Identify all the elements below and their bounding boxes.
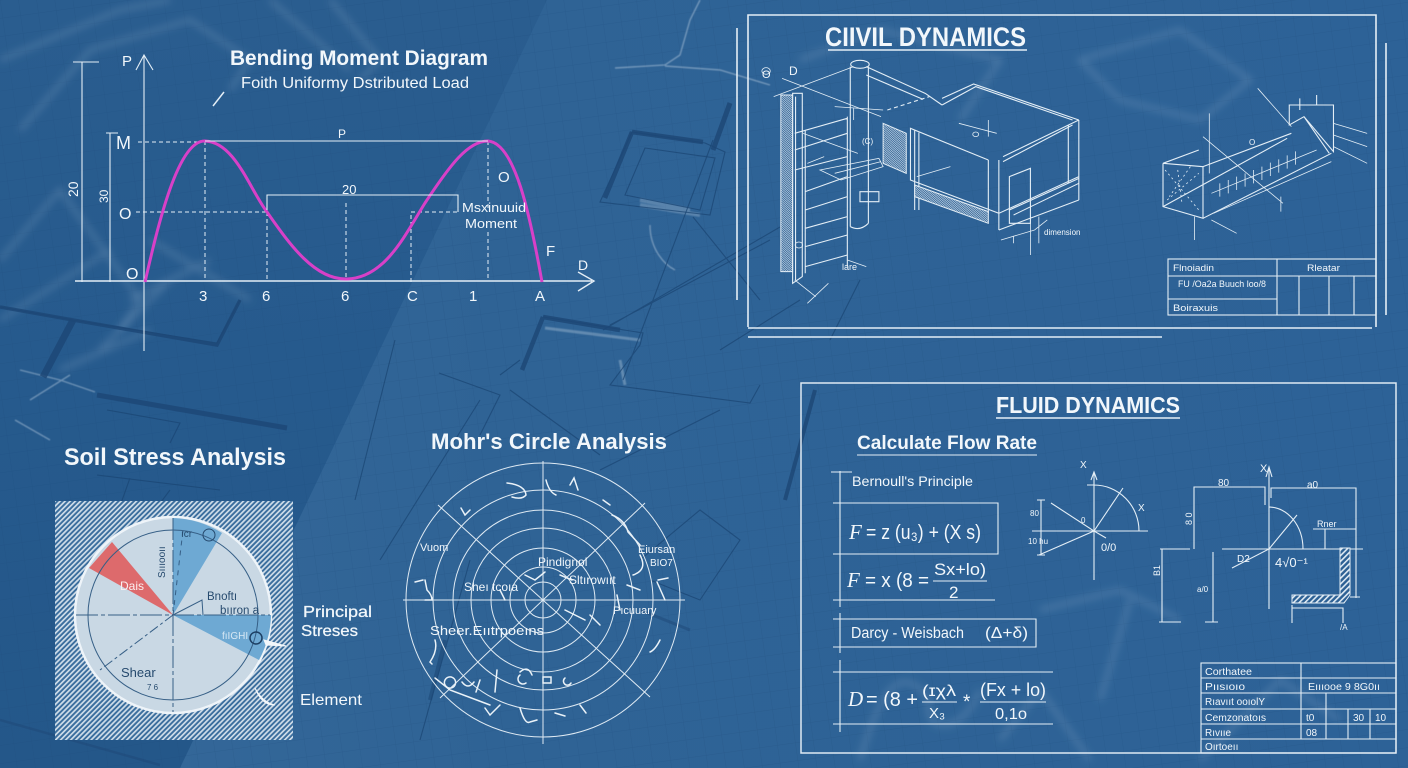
axis labels: 30	[97, 189, 111, 203]
formula: F one: F	[848, 520, 862, 544]
title block: fluid dynamics: 30	[1353, 713, 1365, 724]
diagram: section with dimensions: 8 0	[1184, 512, 1194, 525]
mohr text labels: Vuom	[420, 542, 448, 554]
label: principal stresses: Streses	[301, 623, 358, 640]
small drawing labels: O	[1249, 138, 1255, 147]
axis labels: A	[535, 288, 545, 305]
mohr text labels: Sheı tcoıa	[464, 580, 518, 594]
small drawing labels: (C)	[862, 137, 873, 146]
title: bending moment diagram: Bending Moment Diagram	[230, 47, 488, 70]
sector labels: Bnoftı	[207, 591, 237, 603]
formula: darcy-weisbach: Darcy - Weisbach	[851, 625, 964, 642]
diagram: section with dimensions: B1	[1152, 565, 1162, 576]
label: element: Element	[300, 692, 363, 709]
label: principal stresses	[301, 604, 372, 640]
diagram: section with dimensions: X	[1260, 463, 1268, 475]
panel: fluid dynamics	[801, 383, 1396, 753]
concentric circles	[403, 461, 685, 744]
diagram: section with dimensions: /A	[1340, 623, 1348, 632]
subtitle: calculate flow rate: Calculate Flow Rate	[857, 433, 1037, 454]
frame	[801, 383, 1396, 753]
diagram: small stress axes: X	[1080, 460, 1087, 471]
diagram: section with dimensions	[1152, 463, 1363, 632]
panel: civil dynamics	[737, 15, 1386, 337]
small drawing labels	[762, 64, 1255, 272]
formula rules	[831, 471, 1053, 732]
diagram: section with dimensions: 80	[1218, 478, 1230, 489]
title block: civil dynamics	[1168, 259, 1376, 315]
sector labels: Sıııooıı	[157, 546, 168, 578]
diagram: section with dimensions: a0	[1307, 480, 1319, 491]
title block: fluid dynamics: Rıvııe	[1205, 728, 1232, 739]
title block: fluid dynamics: Rıavııt ooıolY	[1205, 697, 1265, 708]
diagram: small stress axes: 0	[1081, 516, 1086, 525]
frame extra lines	[737, 28, 1386, 337]
title block: fluid dynamics: 10	[1375, 713, 1387, 724]
sector: red	[89, 542, 173, 615]
title: mohr's circle: Mohr's Circle Analysis	[431, 429, 667, 454]
formula: F one: = z (u₃) + (X s)	[866, 522, 981, 544]
title block: fluid dynamics: t0	[1306, 713, 1315, 724]
axis labels: O	[126, 266, 138, 283]
title block: fluid dynamics: Eıııooe 9 8G0ıı	[1308, 682, 1380, 693]
mohr text labels	[420, 542, 675, 638]
label: maximum moment: Moment	[465, 217, 518, 231]
diagram: section with dimensions: 4√0⁻¹	[1275, 555, 1308, 570]
formula: D: (Fx + lo)	[980, 680, 1046, 700]
sector labels: Dais	[120, 579, 144, 593]
axis labels: O	[119, 206, 131, 223]
axis labels: 20	[65, 181, 81, 197]
title block: fluid dynamics: Pıısıoıo	[1205, 682, 1246, 693]
title block: civil dynamics: Flnoiadin	[1173, 263, 1214, 274]
small drawing labels: dimension	[1044, 228, 1080, 237]
axis labels: C	[407, 288, 418, 305]
axis labels: O	[498, 169, 510, 186]
curve: bending moment	[145, 141, 542, 282]
mohr text labels: Pindignol	[538, 555, 587, 569]
frame	[748, 15, 1376, 328]
title block: civil dynamics: Boiraxuis	[1173, 303, 1218, 314]
diagram: small stress axes: 0/0	[1101, 542, 1116, 554]
panel: mohr's circle analysis	[403, 429, 685, 744]
tick mark near subtitle	[213, 92, 224, 106]
drawing: isometric trough	[1163, 88, 1367, 240]
sector labels: 7 6	[147, 683, 159, 692]
formula: D: X₃	[929, 705, 945, 722]
mohr text labels: Sltırowııt	[569, 573, 616, 587]
axis labels	[65, 53, 588, 305]
axis labels: F	[546, 243, 555, 260]
formula: D: (ɪχλ	[922, 683, 956, 700]
pointers	[255, 640, 286, 705]
formula: D: = (8 +	[866, 689, 918, 711]
sector labels	[120, 529, 262, 692]
drawing: isometric frame structure	[762, 60, 1079, 303]
mohr text labels: Pıcuuary	[613, 605, 657, 617]
sector: blue top	[173, 518, 222, 615]
formula: darcy-weisbach	[851, 625, 1028, 642]
formula: D: D	[847, 687, 863, 711]
diagram: section with dimensions: D2	[1237, 554, 1250, 565]
axis labels: 6	[262, 288, 270, 305]
label: maximum moment: Msxinuuid	[462, 201, 526, 215]
title block: fluid dynamics: 08	[1306, 728, 1318, 739]
subtitle: load: Foith Uniformy Dstributed Load	[241, 75, 469, 92]
title block: fluid dynamics: Cemzonatoıs	[1205, 713, 1266, 724]
mohr text labels: Eiursan	[638, 544, 675, 556]
formula: F two: = x (8 =	[865, 570, 929, 592]
title block: fluid dynamics: Corthatee	[1205, 667, 1252, 678]
diagram: section with dimensions: Rner	[1317, 519, 1337, 529]
label: maximum moment	[462, 201, 526, 231]
formula: F two: F	[846, 568, 860, 592]
formula: D: *	[963, 692, 971, 713]
diagram: section with dimensions: a/0	[1197, 585, 1209, 594]
small drawing labels: D	[789, 64, 798, 78]
stress circle	[75, 517, 271, 713]
axis labels: 6	[341, 288, 349, 305]
formula: F two	[846, 560, 987, 602]
title: fluid dynamics: FLUID DYNAMICS	[996, 392, 1180, 418]
axis labels: P	[338, 127, 346, 141]
axis labels: 1	[469, 288, 477, 305]
formula: bernoulli label: Bernoull's Principle	[852, 473, 973, 489]
sector labels: bııron a	[220, 605, 260, 617]
inner circle and axes	[76, 518, 270, 712]
sector labels: ıcr	[181, 529, 193, 540]
axis labels: M	[116, 133, 131, 153]
small drawing labels: lare	[842, 262, 857, 272]
dimension: span top	[205, 140, 488, 142]
sector: blue right	[173, 615, 271, 660]
diagram: small stress axes: 80	[1030, 509, 1039, 518]
title block: civil dynamics: Rleatar	[1307, 263, 1340, 274]
formula: F two: Sx+lo)	[934, 560, 986, 579]
title: soil stress analysis: Soil Stress Analysis	[64, 444, 286, 471]
axis labels: D	[578, 257, 588, 273]
title block: fluid dynamics: Oırtoeıı	[1205, 742, 1238, 753]
dimension: span 20	[267, 195, 458, 212]
diagram: small stress axes: X	[1138, 503, 1145, 514]
hatched square element	[55, 501, 293, 740]
axis labels: 20	[342, 182, 356, 197]
axis labels: 3	[199, 288, 207, 305]
formula: F two: 2	[949, 583, 958, 602]
title block: civil dynamics: FU /Oa2a Buuch loo/8	[1178, 279, 1266, 290]
diagram: small stress axes	[1028, 460, 1148, 580]
title: civil dynamics: CIIVIL DYNAMICS	[825, 22, 1026, 52]
panel: soil stress analysis	[55, 444, 372, 740]
mohr text labels: BIO7	[650, 558, 673, 569]
panel: bending moment diagram	[65, 47, 594, 351]
diagram: small stress axes: 10 hu	[1028, 537, 1048, 546]
axis labels: P	[122, 53, 132, 70]
sector labels: fıIGHI	[222, 631, 248, 642]
mohr text labels: Sheer.Eııtrpoeıns	[430, 623, 545, 638]
formula: D	[847, 680, 1046, 723]
formula: darcy-weisbach: (Δ+δ)	[985, 625, 1028, 642]
title block: fluid dynamics	[1201, 663, 1396, 753]
annotation glyphs	[415, 478, 668, 722]
axes	[73, 55, 594, 351]
formula: D: 0,1o	[995, 706, 1027, 723]
sector labels: Shear	[121, 665, 156, 680]
small drawing labels: O	[762, 69, 771, 81]
label: principal stresses: Principal	[303, 604, 372, 621]
